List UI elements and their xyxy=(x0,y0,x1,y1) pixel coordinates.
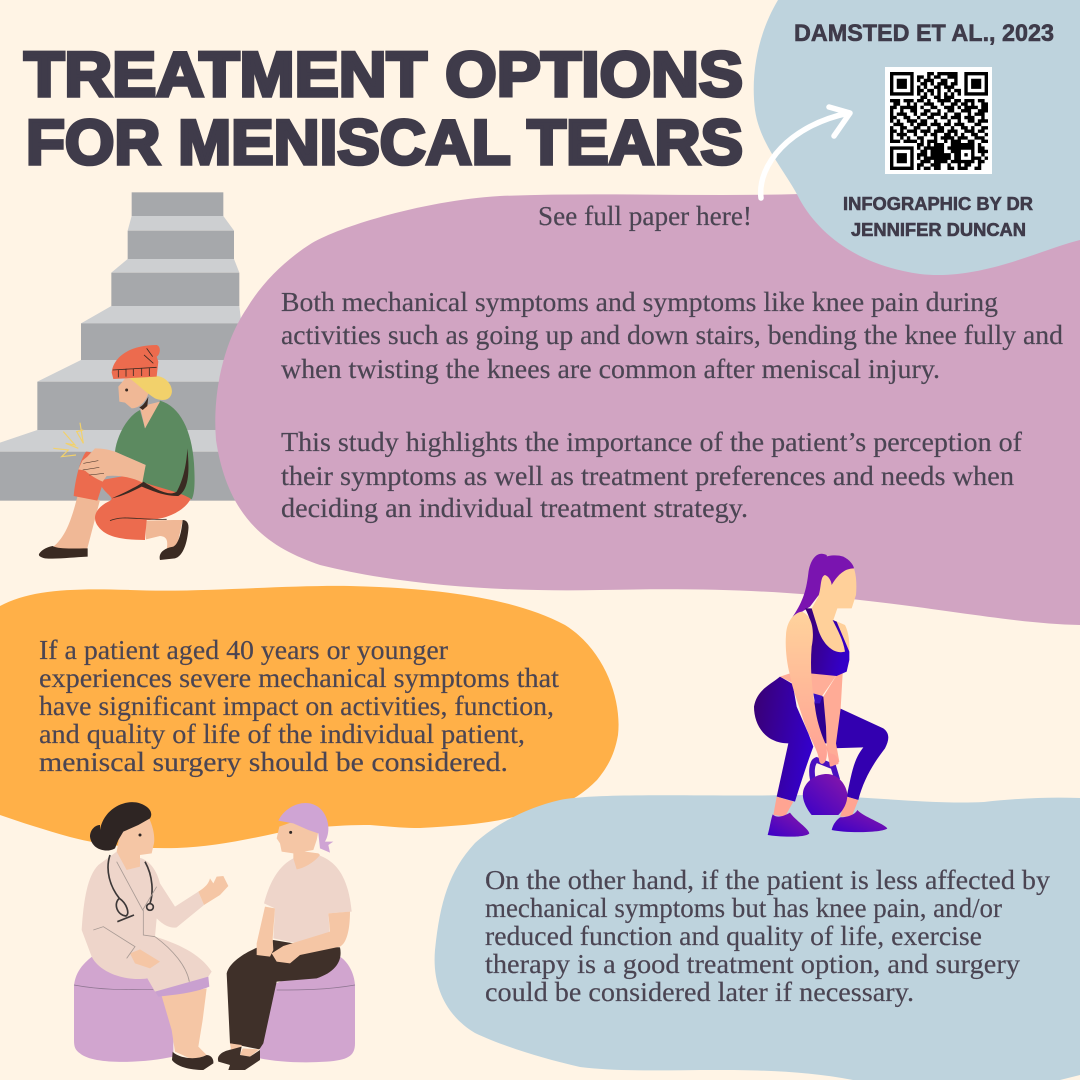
text block: symptoms and patient perception: Both mechanical symptoms and symptoms like knee pain during xyxy=(281,286,998,317)
icon: woman lifting kettlebell xyxy=(754,554,888,837)
text block: symptoms and patient perception: activities such as going up and down stairs, bending the knee fully and xyxy=(281,319,1063,350)
text block: exercise therapy recommendation: could be considered later if necessary. xyxy=(485,976,914,1007)
see full paper caption: See full paper here! xyxy=(538,200,752,231)
text block: exercise therapy recommendation: therapy is a good treatment option, and surgery xyxy=(485,948,1020,979)
text block: surgery recommendation: meniscal surgery should be considered. xyxy=(39,746,508,777)
author credit: INFOGRAPHIC BY DR xyxy=(843,194,1033,214)
panel: blue exercise blob xyxy=(435,795,1080,1080)
text block: symptoms and patient perception: deciding an individual treatment strategy. xyxy=(281,492,748,523)
text block: exercise therapy recommendation: mechanical symptoms but has knee pain, and/or xyxy=(485,892,1002,923)
text block: surgery recommendation: and quality of life of the individual patient, xyxy=(39,718,525,749)
text block: symptoms and patient perception: their symptoms as well as treatment preferences and needs when xyxy=(281,460,1014,491)
QR code xyxy=(885,67,992,174)
author credit: JENNIFER DUNCAN xyxy=(851,220,1026,240)
text block: symptoms and patient perception: This study highlights the importance of the patient’s perception of xyxy=(281,426,1023,457)
text block: exercise therapy recommendation: On the other hand, if the patient is less affected by xyxy=(485,864,1050,895)
stairs illustration xyxy=(0,192,247,501)
text block: exercise therapy recommendation: reduced function and quality of life, exercise xyxy=(485,920,982,951)
text block: surgery recommendation: have significant impact on activities, function, xyxy=(39,690,554,721)
icon: woman holding painful knee xyxy=(39,345,195,560)
text block: symptoms and patient perception xyxy=(281,286,1063,523)
icon: doctor talking with patient on stools xyxy=(74,802,355,1070)
icon: white arrow to QR code xyxy=(761,107,850,198)
title: TREATMENT OPTIONS xyxy=(24,40,743,110)
panel: orange surgery blob xyxy=(0,586,619,848)
author credit xyxy=(843,194,1033,240)
text block: surgery recommendation xyxy=(39,634,559,777)
panel: blue reference blob xyxy=(754,0,1080,275)
panel: purple symptoms blob xyxy=(215,194,1080,625)
text block: surgery recommendation: If a patient aged 40 years or younger xyxy=(39,634,448,665)
citation heading: DAMSTED ET AL., 2023 xyxy=(794,20,1054,47)
text block: symptoms and patient perception: when twisting the knees are common after meniscal injury. xyxy=(281,353,940,384)
text block: exercise therapy recommendation xyxy=(485,864,1050,1007)
title xyxy=(24,40,743,178)
text block: surgery recommendation: experiences severe mechanical symptoms that xyxy=(39,662,559,693)
title: FOR MENISCAL TEARS xyxy=(26,108,743,178)
